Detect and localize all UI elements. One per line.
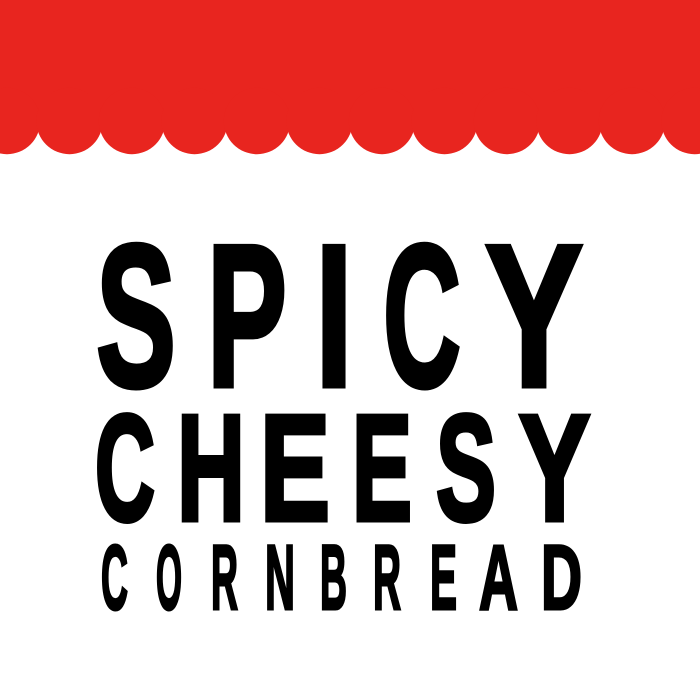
title line: CORNBREAD: B	[320, 527, 347, 629]
title line: CHEESY: H	[177, 383, 245, 552]
title line: CORNBREAD	[101, 527, 582, 629]
title line: CORNBREAD: R	[211, 527, 238, 629]
title line: CHEESY: E	[260, 383, 330, 552]
title line: CORNBREAD: O	[156, 527, 182, 629]
title	[95, 203, 590, 629]
title line: CHEESY	[95, 383, 590, 552]
title line: CHEESY: C	[95, 383, 155, 552]
title line: CORNBREAD: C	[101, 527, 128, 629]
title line: SPICY: Y	[485, 203, 583, 430]
title line: CORNBREAD: E	[430, 527, 457, 629]
red scalloped awning	[0, 0, 700, 154]
title line: CORNBREAD: N	[265, 527, 295, 629]
title line: SPICY: S	[96, 203, 176, 430]
title line: CORNBREAD: A	[479, 527, 518, 629]
title line: SPICY: C	[383, 203, 461, 430]
title line: SPICY: I	[315, 203, 353, 430]
title line: CHEESY: E	[352, 383, 412, 552]
title line: SPICY	[96, 203, 583, 430]
title line: CHEESY: Y	[519, 383, 590, 552]
title line: CHEESY: S	[436, 383, 496, 552]
title line: CORNBREAD: R	[373, 527, 401, 629]
title line: SPICY: P	[207, 203, 287, 430]
title line: CORNBREAD: D	[541, 527, 582, 629]
